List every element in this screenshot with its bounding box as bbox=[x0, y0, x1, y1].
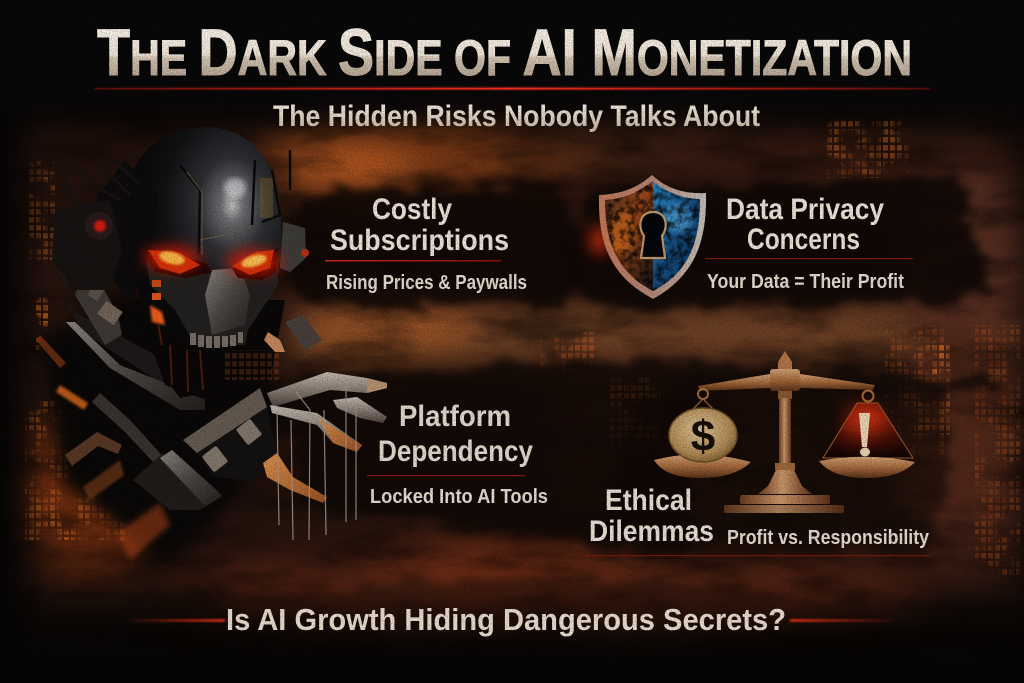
heading: Platform bbox=[399, 400, 511, 433]
heading: Ethical bbox=[605, 484, 692, 517]
robot figure bbox=[36, 127, 387, 565]
heading: Dilemmas bbox=[589, 515, 714, 548]
fingers bbox=[263, 372, 387, 503]
robot ear modules bbox=[52, 200, 322, 352]
subtext: Profit vs. Responsibility bbox=[727, 527, 930, 549]
bottom question banner: Is AI Growth Hiding Dangerous Secrets? bbox=[226, 602, 786, 637]
robot glowing eyes bbox=[144, 246, 282, 275]
panel: ethical dilemmas bbox=[585, 484, 930, 556]
panel: platform dependency bbox=[367, 400, 548, 508]
title: THE DARK SIDE OF AI MONETIZATION bbox=[97, 15, 912, 89]
heading: Data Privacy bbox=[726, 193, 884, 226]
heading: Subscriptions bbox=[330, 224, 509, 257]
subtext: Rising Prices & Paywalls bbox=[326, 272, 527, 294]
heading: Costly bbox=[372, 193, 452, 226]
heading: Concerns bbox=[747, 223, 860, 256]
dark streak panels bbox=[160, 176, 1000, 642]
robot hand with puppet strings bbox=[133, 372, 387, 540]
scale stand bbox=[698, 351, 875, 513]
subtext: Locked Into AI Tools bbox=[370, 486, 548, 508]
subtitle: The Hidden Risks Nobody Talks About bbox=[273, 100, 760, 133]
title divider bbox=[95, 87, 930, 90]
strings bbox=[277, 378, 356, 540]
robot helmet dome bbox=[55, 127, 290, 345]
background: dark rust texture bbox=[12, 109, 1024, 640]
heading: Dependency bbox=[378, 435, 533, 468]
subtext: Your Data = Their Profit bbox=[707, 271, 904, 293]
panel: data privacy concerns bbox=[705, 193, 913, 293]
panel: costly subscriptions bbox=[325, 193, 527, 294]
heading bbox=[378, 400, 533, 468]
icon: balance scale bbox=[654, 351, 915, 513]
digital grid squares bbox=[25, 120, 1020, 575]
left pan with dollar coin: $ bbox=[691, 412, 715, 461]
robot face mask bbox=[140, 248, 278, 348]
forearm and wrist bbox=[133, 388, 277, 510]
robot neck and cables bbox=[135, 280, 285, 405]
vignette edges bbox=[0, 0, 45, 683]
heading bbox=[726, 193, 884, 256]
icon: shield with keyhole bbox=[590, 175, 706, 300]
robot shoulder and arm plates bbox=[36, 250, 300, 565]
heading bbox=[589, 484, 714, 548]
heading bbox=[330, 193, 509, 257]
left pan with dollar coin bbox=[654, 389, 751, 478]
right pan with warning bbox=[819, 390, 915, 478]
